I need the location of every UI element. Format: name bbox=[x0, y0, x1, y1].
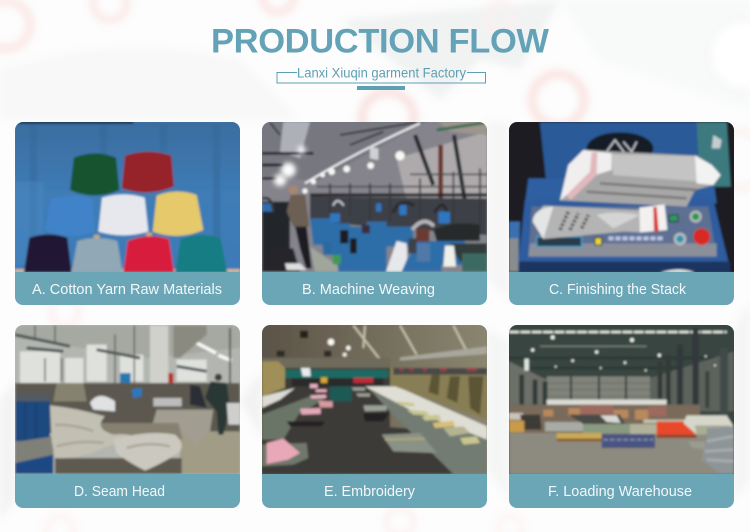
caption bar bbox=[262, 474, 487, 508]
panel: D. Seam Head bbox=[13, 323, 243, 508]
subtitle with bracket: Lanxi Xiuqin garment Factory bbox=[297, 64, 466, 80]
caption bar bbox=[15, 474, 240, 508]
panel: A. Cotton Yarn Raw Materials bbox=[13, 120, 243, 305]
photo: socks on control panel bbox=[507, 120, 737, 273]
title: PRODUCTION FLOW bbox=[211, 22, 549, 60]
photo: knitting machines bbox=[260, 120, 490, 273]
photo: warehouse bbox=[507, 323, 737, 476]
caption bar: E. Embroidery bbox=[324, 484, 416, 500]
caption bar bbox=[509, 272, 734, 305]
caption bar: D. Seam Head bbox=[74, 484, 165, 500]
panel: C. Finishing the Stack bbox=[507, 120, 737, 305]
panel: F. Loading Warehouse bbox=[507, 323, 737, 508]
photo: embroidery machines bbox=[260, 323, 490, 476]
caption bar: F. Loading Warehouse bbox=[548, 484, 692, 500]
panel: E. Embroidery bbox=[260, 323, 490, 508]
caption bar bbox=[262, 272, 487, 305]
photo: yarn cones bbox=[13, 120, 243, 273]
caption bar bbox=[15, 272, 240, 305]
caption bar: A. Cotton Yarn Raw Materials bbox=[32, 282, 222, 298]
photo: sewing workshop bbox=[13, 323, 243, 476]
accent bar bbox=[357, 86, 405, 90]
panel: B. Machine Weaving bbox=[260, 120, 490, 305]
caption bar bbox=[509, 474, 734, 508]
caption bar: B. Machine Weaving bbox=[302, 282, 435, 298]
caption bar: C. Finishing the Stack bbox=[549, 282, 687, 298]
